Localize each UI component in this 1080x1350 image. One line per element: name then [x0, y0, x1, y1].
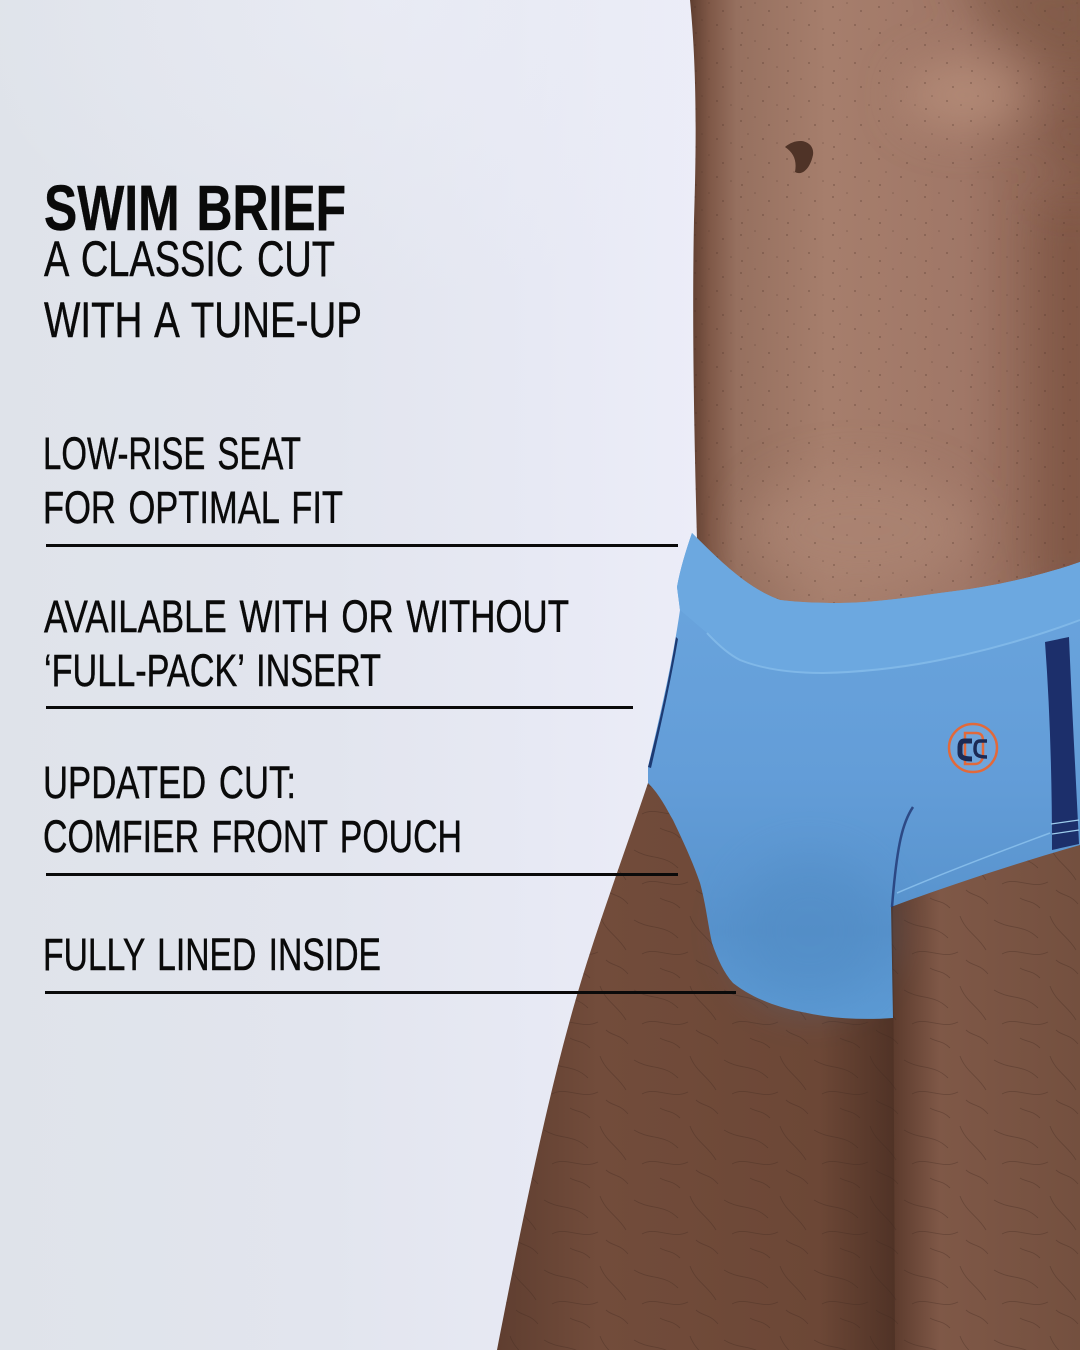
navy side stripe	[1045, 637, 1079, 850]
photo: model wearing swim brief	[497, 0, 1080, 1350]
feature: updated cut	[43, 757, 678, 876]
swim brief	[648, 533, 1080, 1019]
left leg	[497, 770, 900, 1350]
lower shadow on pouch	[735, 855, 885, 1005]
feature: low-rise seat: LOW-RISE SEAT	[43, 428, 301, 479]
torso	[690, 0, 1080, 640]
heading: SWIM BRIEF	[44, 172, 346, 244]
side piping left	[648, 637, 678, 768]
subheading: A CLASSIC CUT	[44, 231, 335, 287]
leg opening seam	[897, 833, 1050, 893]
feature: low-rise seat	[43, 428, 678, 547]
feature: low-rise seat: FOR OPTIMAL FIT	[43, 482, 343, 533]
waistband seam	[707, 620, 1080, 673]
right leg	[893, 835, 1080, 1350]
icon: embroidered logo	[949, 724, 997, 772]
feature: full-pack insert: ‘FULL-PACK’ INSERT	[44, 645, 381, 696]
waistband shading	[677, 533, 1080, 673]
subheading: WITH A TUNE-UP	[44, 292, 362, 348]
feature: updated cut: COMFIER FRONT POUCH	[43, 811, 462, 862]
stripe stitching	[1051, 820, 1079, 834]
feature: updated cut: UPDATED CUT:	[43, 757, 296, 808]
subheading	[44, 231, 362, 348]
icon: navel	[785, 141, 813, 173]
feature: full-pack insert	[44, 591, 633, 709]
feature: fully lined: FULLY LINED INSIDE	[43, 929, 381, 980]
front pouch fold	[892, 807, 913, 907]
feature: full-pack insert: AVAILABLE WITH OR WITHOUT	[44, 591, 569, 642]
leg hair texture	[497, 770, 1080, 1350]
feature: fully lined	[43, 929, 736, 994]
